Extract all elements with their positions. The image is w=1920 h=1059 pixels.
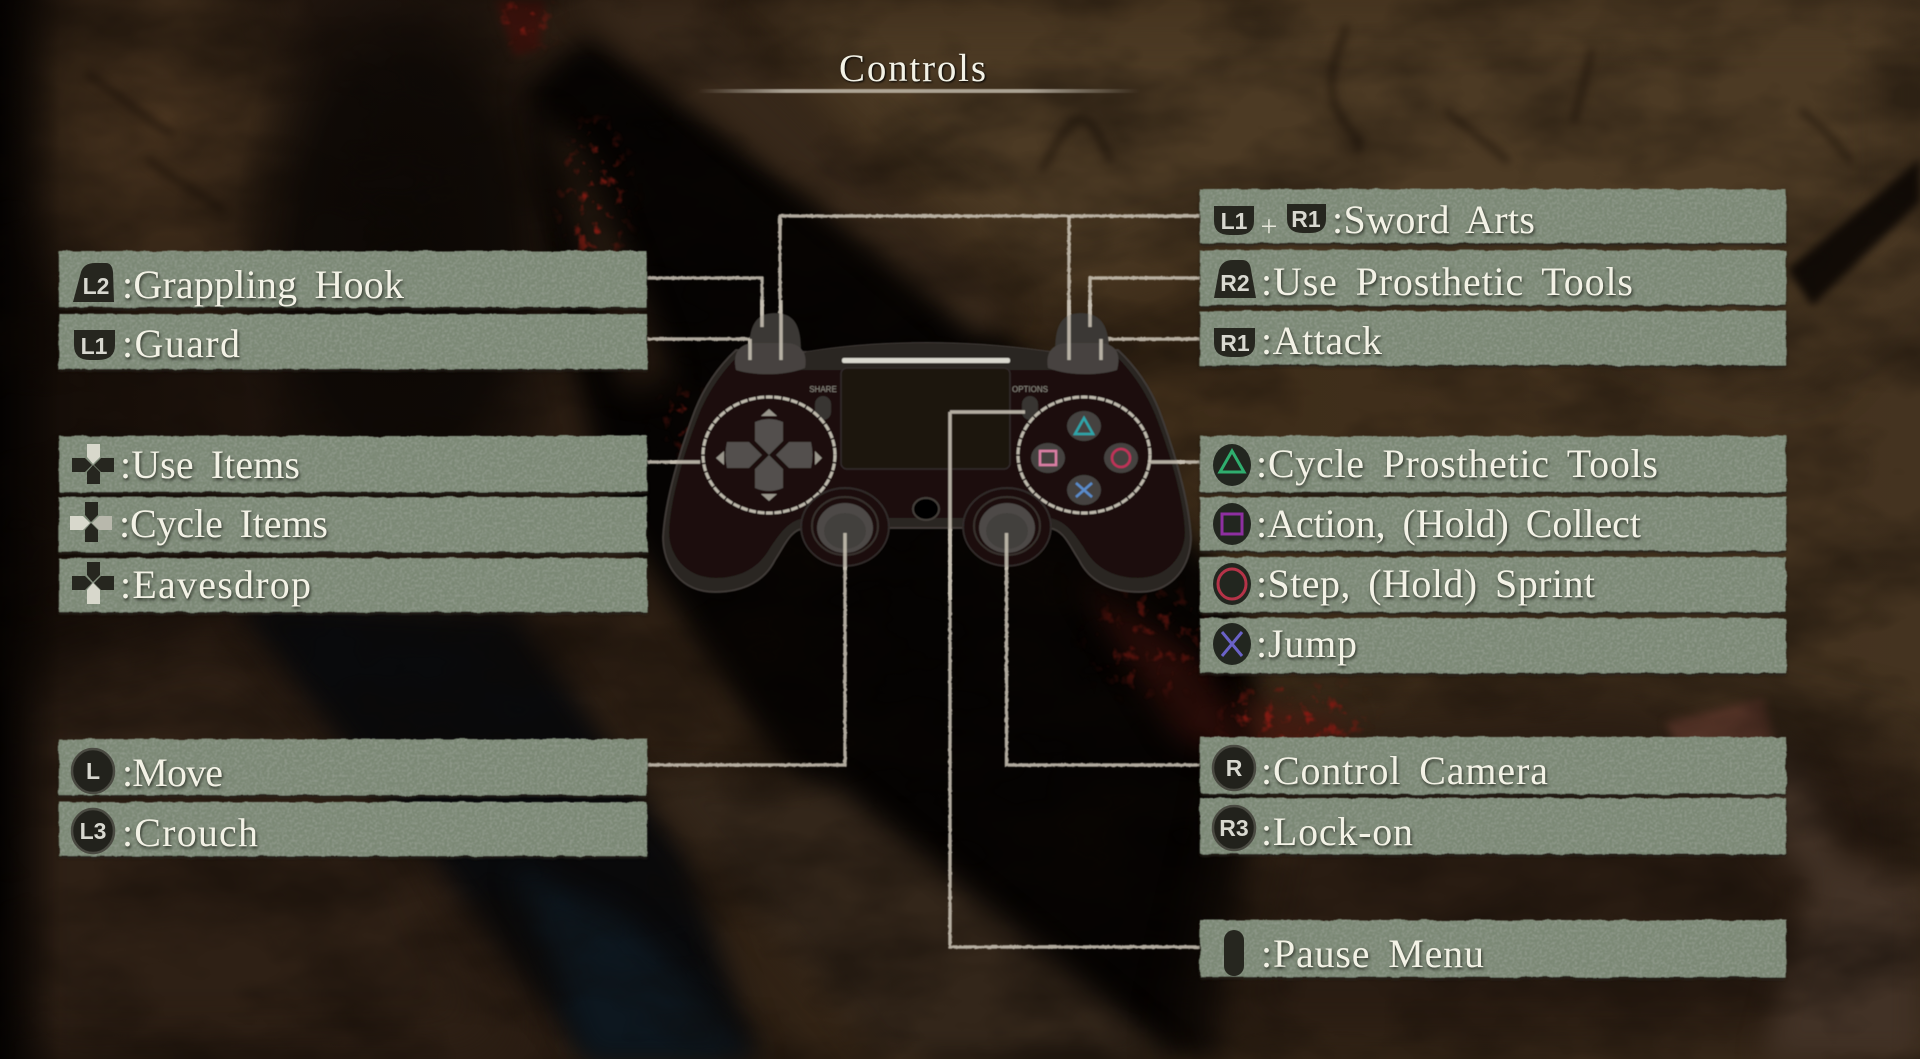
right stick [963,488,1051,566]
label: :Use Items [120,442,300,487]
panel: circle step sprint [1200,557,1786,612]
label: :Control Camera [1261,748,1548,793]
right R1 bumper [1047,343,1118,374]
icon: L1 bumper: L1 [81,333,108,359]
icon: square [1213,503,1251,545]
icon: circle [1213,563,1251,605]
circle button [1104,443,1138,473]
panel: R1 attack [1200,311,1786,365]
controller face [669,358,1185,578]
label: :Attack [1261,318,1382,363]
label: :Cycle Prosthetic Tools [1256,441,1658,486]
icon: L stick: L [86,758,100,784]
options button: OPTIONS [1012,385,1048,394]
icon: L1 bumper: L1 [1221,208,1248,234]
face buttons [1018,397,1150,513]
controller [663,300,1191,600]
panel: L3 crouch [59,802,647,856]
panel: d-pad up use items [59,436,647,492]
left L1 bumper [735,343,806,374]
icon: L3 stick [72,809,114,853]
panel: L2 grappling hook [59,251,647,307]
icon: L1 bumper [1214,206,1254,235]
icon: d-pad left right [70,502,112,542]
panel: L1 guard [59,314,647,369]
label: :Pause Menu [1261,931,1484,976]
icon: L1 bumper [74,330,115,360]
plus sign: + [1261,210,1277,243]
left L2 trigger [749,313,801,350]
right R2 trigger [1055,313,1109,350]
share button [809,385,837,420]
icon: triangle [1213,444,1251,486]
panel: R3 lock-on [1200,798,1786,854]
label: :Crouch [122,810,258,855]
label: :Eavesdrop [120,562,311,607]
panel: R stick control camera [1200,737,1786,794]
label: :Grappling Hook [122,262,404,307]
icon: R1 bumper: R1 [1291,206,1321,232]
icon: L2 trigger: L2 [83,273,109,299]
icon: R3 stick: R3 [1219,815,1249,841]
left stick [801,488,889,566]
top bar [795,343,1060,370]
icon: L3 stick: L3 [80,818,106,844]
controller body [663,343,1191,592]
triangle button [1067,411,1101,441]
icon: R stick: R [1226,755,1243,781]
title: Controls [839,47,986,90]
touchpad [841,368,1010,469]
label: :Guard [122,321,240,366]
panel: L stick move [59,739,647,795]
label: :Move [122,750,223,795]
panel: d-pad left right cycle items [59,497,647,552]
label: :Step, (Hold) Sprint [1256,561,1595,606]
icon: L stick [72,749,114,793]
icon: cross [1213,623,1251,665]
panel: d-pad down eavesdrop [59,558,647,612]
panel: options pause menu [1200,920,1786,977]
panel: L1 R1 sword arts [1200,189,1786,243]
icon: R stick [1213,746,1255,790]
d-pad [703,397,835,513]
icon: d-pad down [72,562,114,604]
title underline [698,89,1140,93]
icon: R2 trigger: R2 [1220,270,1250,296]
icon: L2 trigger [73,263,114,302]
share button: SHARE [809,385,837,394]
label: :Use Prosthetic Tools [1261,259,1633,304]
icon: R2 trigger [1214,260,1256,298]
label: :Action, (Hold) Collect [1256,501,1641,546]
options button [1012,385,1048,420]
connector lines over controller [670,300,1185,600]
square button [1031,443,1065,473]
panel: square action collect [1200,497,1786,551]
icon: R3 stick [1213,806,1255,850]
light bar [842,358,1010,363]
icon: R1 bumper [1287,204,1326,233]
label: :Sword Arts [1332,197,1535,242]
label: :Jump [1256,621,1357,666]
label: :Lock-on [1261,809,1413,854]
icon: R1 bumper: R1 [1220,330,1250,356]
connector lines [647,216,1200,947]
panel: triangle cycle prosthetic tools [1200,436,1786,492]
panel: cross jump [1200,618,1786,673]
icon: R1 bumper [1214,328,1255,357]
panel: R2 use prosthetic tools [1200,250,1786,305]
headphone jack [913,498,939,520]
icon: d-pad up [72,444,114,484]
cross button [1067,475,1101,505]
icon: options pill [1224,930,1244,976]
label: :Cycle Items [119,501,328,546]
